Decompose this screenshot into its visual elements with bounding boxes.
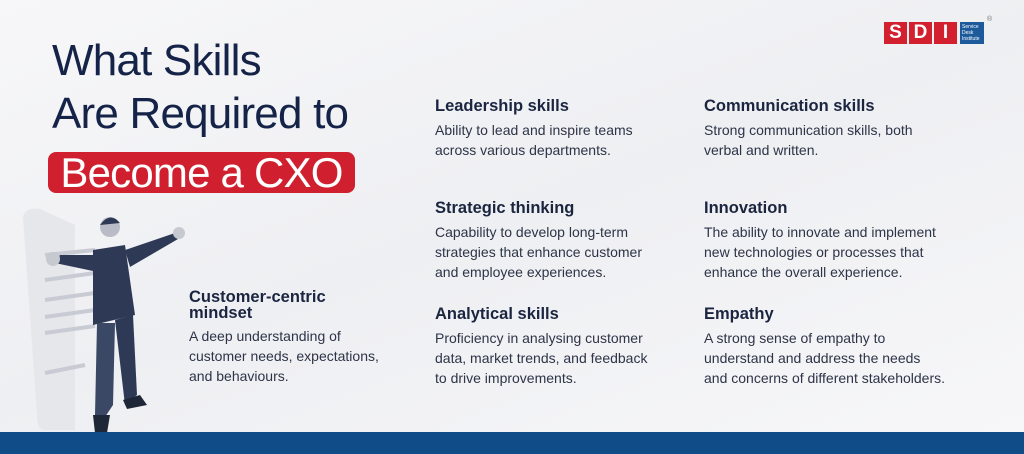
skill: Empathy: A strong sense of empathy to (704, 330, 885, 346)
skill: Customer-centric mindset: customer needs, expectations, (189, 348, 379, 364)
skill: Strategic thinking: Capability to develop long-term (435, 224, 628, 240)
logo (884, 16, 992, 44)
title (48, 36, 355, 196)
skill: Analytical skills: to drive improvements. (435, 370, 577, 386)
skill: Empathy (704, 305, 945, 386)
skill: Customer-centric mindset: mindset (189, 304, 252, 322)
skill: Strategic thinking (435, 199, 642, 280)
skill: Customer-centric mindset (189, 288, 379, 384)
title: Are Required to (52, 89, 348, 138)
footer bar (0, 432, 1024, 454)
logo: ® (987, 16, 992, 23)
skill: Analytical skills (435, 305, 648, 386)
skill: Customer-centric mindset: A deep understanding of (189, 328, 341, 344)
skill: Analytical skills: Analytical skills (435, 305, 559, 323)
title highlight: Become a CXO: Become a CXO (60, 149, 343, 196)
skill: Leadership skills: Ability to lead and inspire teams (435, 122, 633, 138)
skill: Customer-centric mindset: Customer-centric (189, 288, 326, 306)
skill: Strategic thinking: and employee experiences. (435, 264, 606, 280)
logo: I (943, 22, 948, 43)
skill: Empathy: understand and address the needs (704, 350, 920, 366)
skill: Leadership skills: Leadership skills (435, 97, 569, 115)
skill: Empathy: Empathy (704, 305, 774, 323)
logo: D (914, 22, 927, 43)
skill: Customer-centric mindset: and behaviours. (189, 368, 289, 384)
skill: Innovation (704, 199, 936, 280)
skill: Analytical skills: Proficiency in analysing customer (435, 330, 643, 346)
skill: Leadership skills (435, 97, 633, 158)
title: What Skills (52, 36, 261, 85)
skill: Communication skills (704, 97, 913, 158)
skill: Innovation: new technologies or processes that (704, 244, 923, 260)
skill: Analytical skills: data, market trends, and feedback (435, 350, 647, 366)
skill: Innovation: The ability to innovate and implement (704, 224, 936, 240)
skill: Communication skills: Communication skills (704, 97, 875, 115)
illustration: businessman with document (23, 208, 185, 432)
skill: Innovation: Innovation (704, 199, 787, 217)
logo: Service Desk Institute (962, 24, 980, 42)
skill: Communication skills: verbal and written. (704, 142, 818, 158)
skill: Strategic thinking: strategies that enhance customer (435, 244, 642, 260)
skill: Communication skills: Strong communication skills, both (704, 122, 913, 138)
skill: Strategic thinking: Strategic thinking (435, 199, 574, 217)
skill: Empathy: and concerns of different stakeholders. (704, 370, 945, 386)
skill: Leadership skills: across various departments. (435, 142, 611, 158)
logo: S (889, 22, 902, 43)
skill: Innovation: enhance the overall experience. (704, 264, 902, 280)
